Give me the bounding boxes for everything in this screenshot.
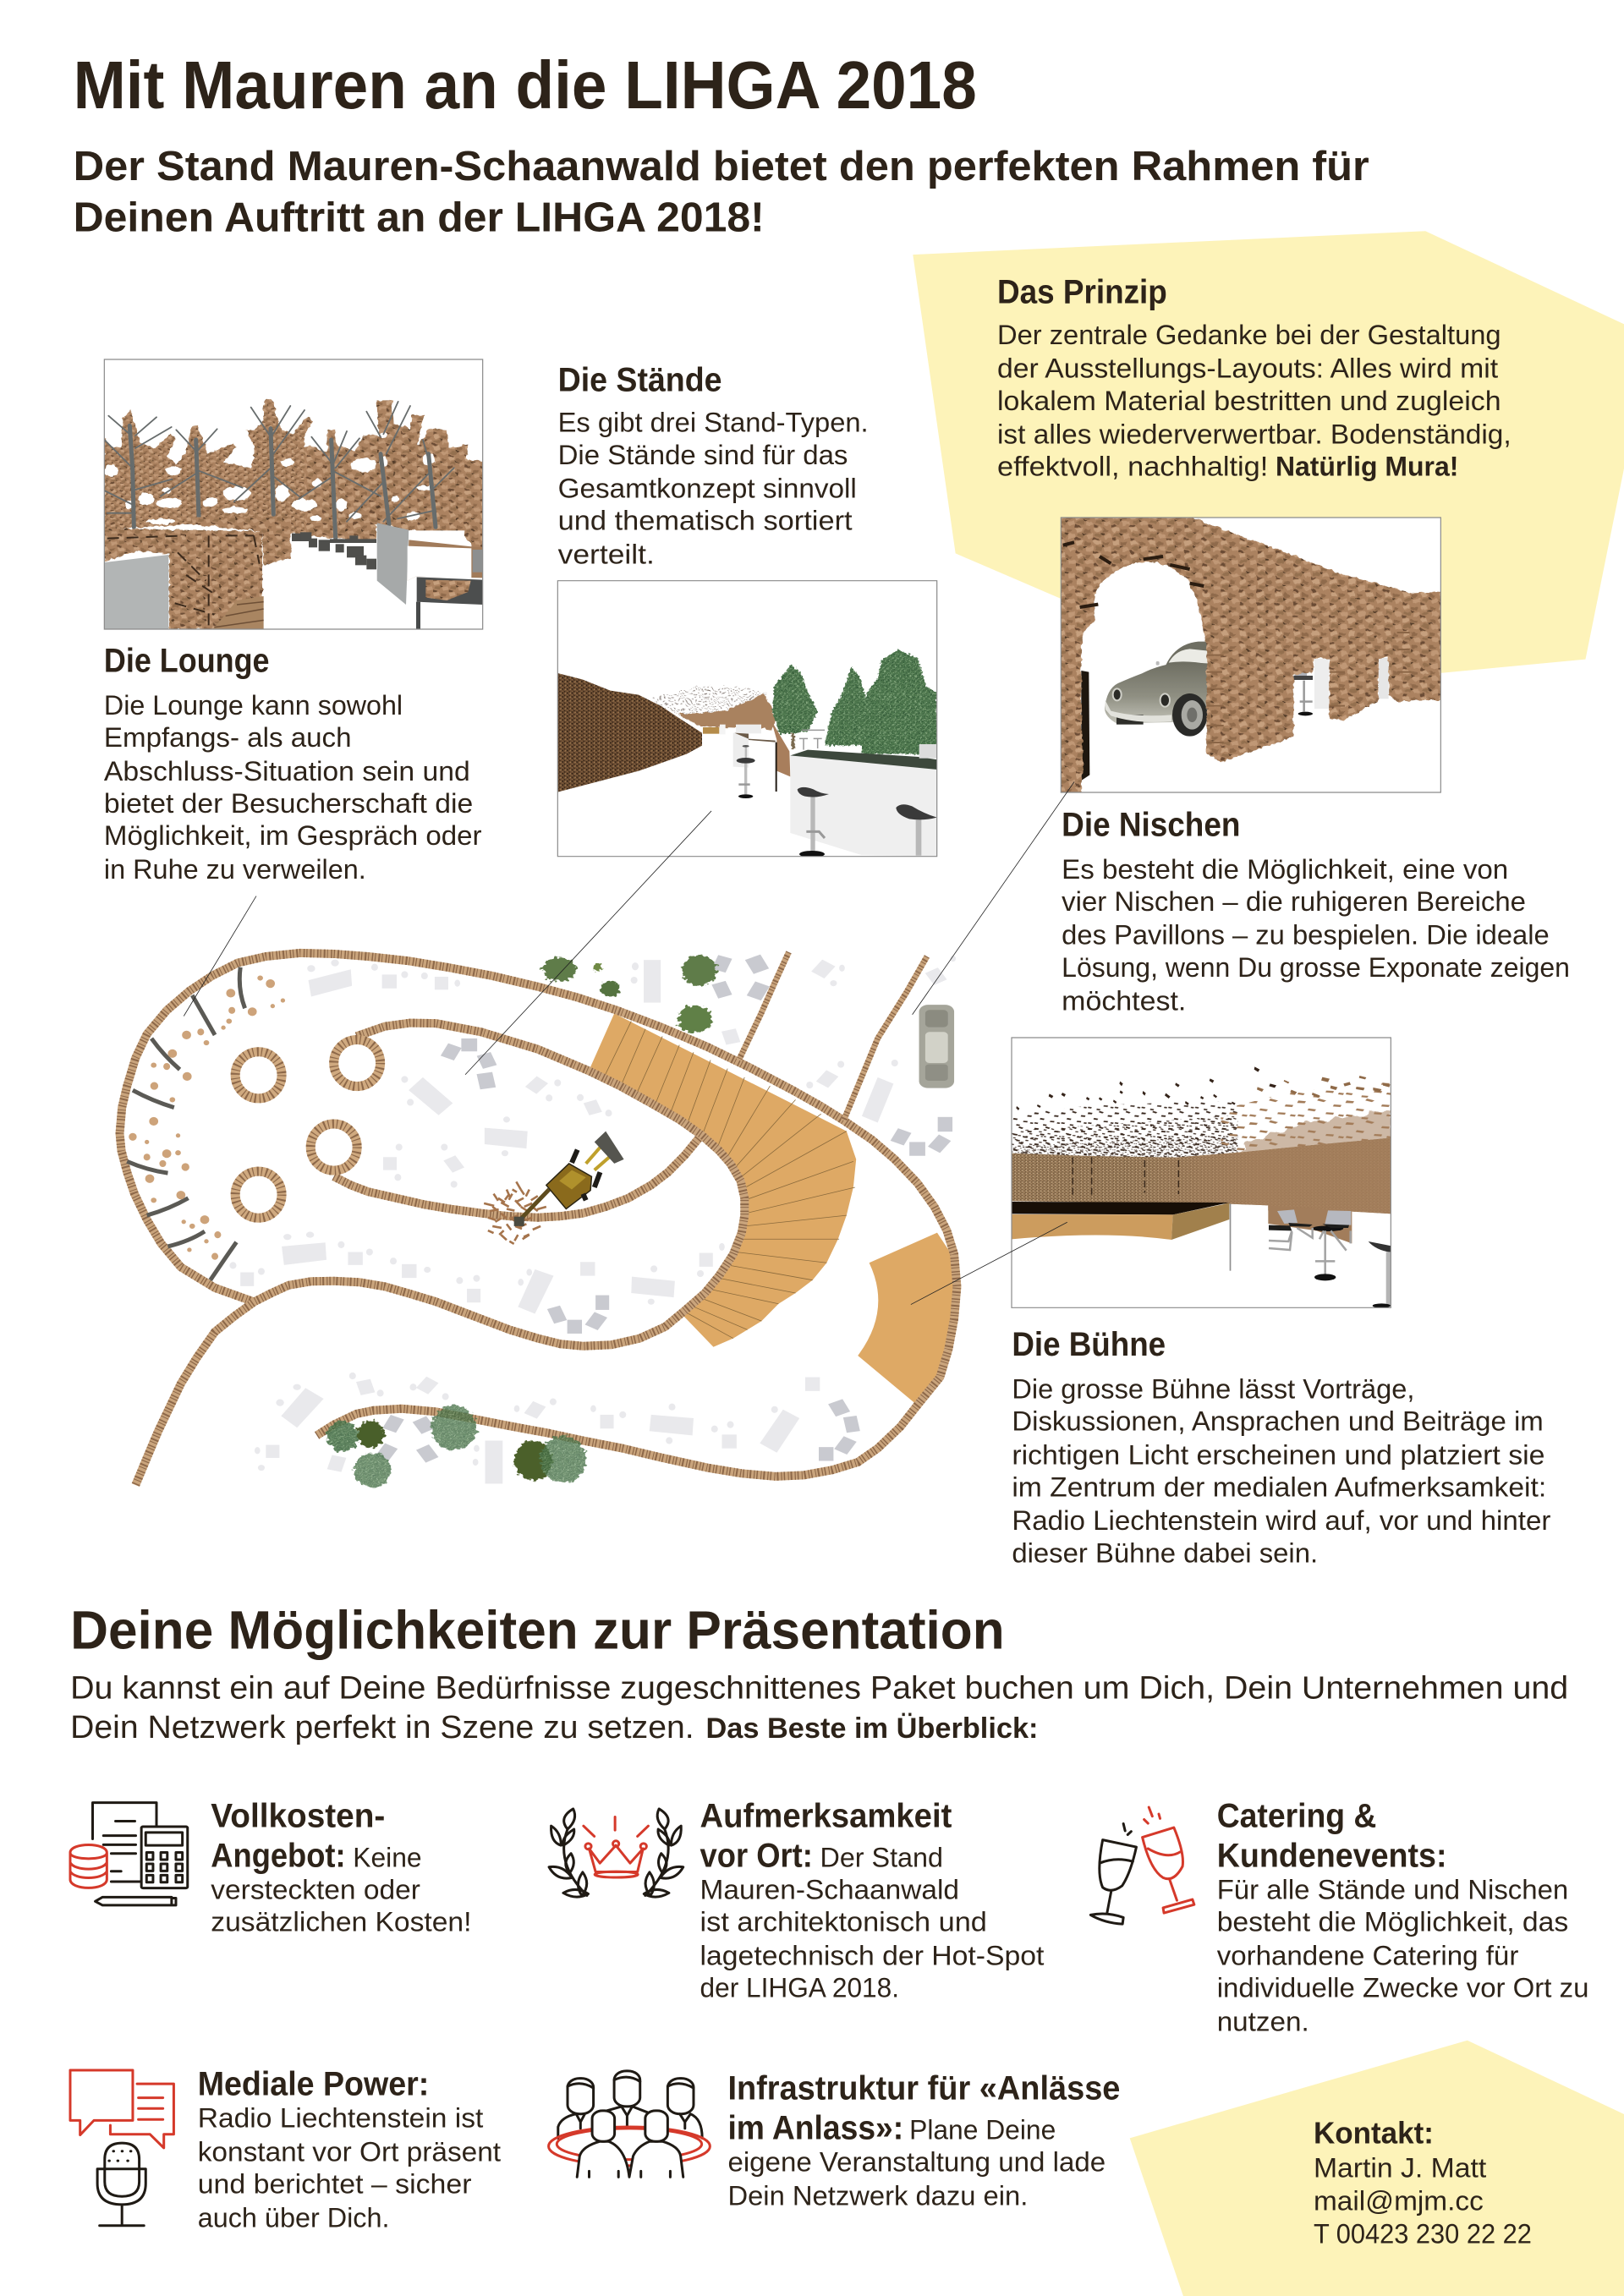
floating chips	[1012, 1066, 1391, 1158]
text block: Das Prinzip: ist alles wiederverwertbar. Bodenständig,	[997, 419, 1512, 450]
wood rings	[235, 1039, 381, 1218]
text block: Catering: besteht die Möglichkeit, das	[1217, 1907, 1568, 1937]
stool and white counters	[1293, 658, 1389, 715]
text block: Infrastruktur: Infrastruktur für «Anlässe	[727, 2070, 1120, 2107]
text block: Infrastruktur: Plane Deine	[909, 2114, 1056, 2145]
text block: Die Bühne	[1012, 1326, 1551, 1568]
text block: Die Bühne: richtigen Licht erscheinen und platziert sie	[1012, 1439, 1545, 1470]
text block: Das Prinzip: Der zentrale Gedanke bei der Gestaltung	[997, 320, 1501, 350]
text block: Die Stände: Gesamtkonzept sinnvoll	[558, 474, 857, 504]
text block: Vollkosten: versteckten oder	[211, 1874, 420, 1904]
text block: Mediale Power: Radio Liechtenstein ist	[198, 2103, 483, 2134]
yellow shape: Kontakt	[1130, 2041, 1624, 2296]
text block: Die Stände: verteilt.	[558, 540, 655, 570]
wall band	[1012, 1137, 1393, 1214]
icon: chat bubbles and microphone	[70, 2070, 173, 2226]
chairs and tables	[1269, 1209, 1393, 1308]
text block: Kontakt: T 00423 230 22 22	[1314, 2218, 1532, 2249]
trees top view	[326, 955, 716, 1488]
text block: Vollkosten: zusätzlichen Kosten!	[211, 1907, 471, 1937]
text block: Kontakt	[1314, 2116, 1532, 2249]
text block: Catering: Kundenevents:	[1217, 1837, 1447, 1874]
text block: Mediale Power: und berichtet – sicher	[198, 2168, 472, 2199]
text block: Die Nischen: Es besteht die Möglichkeit, eine von	[1062, 854, 1508, 885]
intro paragraph	[70, 1670, 1568, 1745]
text block: Infrastruktur: Dein Netzwerk dazu ein.	[727, 2180, 1028, 2211]
text block: Aufmerksamkeit: Aufmerksamkeit	[700, 1798, 952, 1835]
icon: calculator and documents	[70, 1803, 188, 1905]
text block: Das Prinzip: lokalem Material bestritten und zugleich	[997, 386, 1501, 416]
text block: Infrastruktur	[727, 2070, 1120, 2211]
text block: Catering: individuelle Zwecke vor Ort zu	[1217, 1972, 1588, 2003]
text block: Aufmerksamkeit: Mauren-Schaanwald	[700, 1874, 959, 1904]
text block: Die Lounge	[104, 643, 482, 885]
distant pavilion roof	[651, 687, 776, 734]
dark wood wall	[557, 673, 702, 792]
text block: Die Lounge: Möglichkeit, im Gespräch oder	[104, 820, 482, 851]
text block: Die Lounge: Abschluss-Situation sein und	[104, 756, 470, 786]
text block: Aufmerksamkeit: vor Ort:	[700, 1837, 813, 1874]
text block: Catering	[1217, 1798, 1588, 2036]
leader lines	[184, 782, 1074, 1305]
wall blocks	[104, 516, 291, 629]
text block: Die Lounge: Empfangs- als auch	[104, 722, 352, 753]
text block: Das Prinzip: der Ausstellungs-Layouts: Alles wird mit	[997, 353, 1498, 384]
tree canopy	[105, 399, 482, 547]
photo: Nischen	[1059, 516, 1444, 795]
title: Mit Mauren an die LIHGA 2018	[74, 47, 977, 123]
lounge seat groups	[376, 955, 952, 1463]
text block: Mediale Power	[198, 2065, 501, 2233]
text block: Die Lounge: bietet der Besucherschaft die	[104, 788, 473, 819]
furniture tables	[229, 956, 956, 1484]
text block: Aufmerksamkeit: der LIHGA 2018.	[700, 1972, 899, 2003]
white aisle	[262, 540, 416, 629]
text block: Die Bühne: Diskussionen, Ansprachen und Beiträge im	[1012, 1406, 1544, 1436]
sky gaps	[104, 433, 435, 524]
icon: people around ring	[549, 2071, 710, 2177]
text block: Die Nischen: möchtest.	[1062, 986, 1186, 1016]
intro paragraph: Das Beste im Überblick:	[705, 1712, 1038, 1745]
text block: Catering: nutzen.	[1217, 2006, 1309, 2036]
text block: Die Stände	[558, 361, 869, 570]
trees	[772, 649, 937, 754]
text block: Mediale Power: konstant vor Ort präsent	[198, 2136, 501, 2167]
text block: Infrastruktur: eigene Veranstaltung und lade	[727, 2146, 1106, 2177]
text block: Die Bühne: dieser Bühne dabei sein.	[1012, 1537, 1318, 1568]
text block: Vollkosten: Vollkosten-	[211, 1798, 385, 1835]
yellow shape: Das Prinzip	[913, 231, 1624, 673]
text block: Die Lounge: Die Lounge	[104, 643, 270, 680]
text block: Aufmerksamkeit: ist architektonisch und	[700, 1907, 987, 1937]
text block: Aufmerksamkeit: lagetechnisch der Hot-Spot	[700, 1940, 1044, 1970]
dark steps	[292, 532, 376, 569]
text block: Die Stände: Es gibt drei Stand-Typen.	[558, 408, 869, 438]
counters	[733, 721, 937, 857]
lounge seats dots	[129, 975, 285, 1260]
stage floor: stairs fan	[589, 1013, 856, 1347]
text block: Kontakt: Martin J. Matt	[1314, 2152, 1486, 2183]
car top view	[919, 1005, 954, 1088]
tree trunks	[104, 402, 454, 539]
text block: Die Lounge: in Ruhe zu verweilen.	[104, 854, 366, 885]
text block: Die Bühne: Die Bühne	[1012, 1326, 1166, 1363]
text block: Die Bühne: im Zentrum der medialen Aufmerksamkeit:	[1012, 1471, 1546, 1502]
text block: Mediale Power: auch über Dich.	[198, 2202, 390, 2233]
text block: Vollkosten	[211, 1798, 471, 1937]
text block: Mediale Power: Mediale Power:	[198, 2065, 429, 2102]
text block: Catering: Catering &	[1217, 1798, 1376, 1835]
text block: Aufmerksamkeit	[700, 1798, 1044, 2003]
photo: Lounge	[104, 359, 485, 629]
text block: Die Bühne: Die grosse Bühne lässt Vorträge,	[1012, 1373, 1414, 1404]
text block: Die Nischen: des Pavillons – zu bespielen. Die ideale	[1062, 920, 1550, 951]
text block: Infrastruktur: im Anlass»:	[727, 2109, 903, 2146]
subtitle: Deinen Auftritt an der LIHGA 2018!	[74, 195, 765, 241]
car	[1105, 642, 1211, 737]
stage slab	[1012, 1202, 1229, 1240]
intro paragraph: Dein Netzwerk perfekt in Szene zu setzen.	[70, 1710, 694, 1745]
subtitle	[74, 143, 1369, 241]
section heading: Deine Möglichkeiten zur Präsentation	[70, 1599, 1005, 1660]
wood chips pile	[484, 1181, 546, 1244]
floor plan	[120, 952, 957, 1488]
text block: Das Prinzip: Das Prinzip	[997, 273, 1167, 310]
text block: Die Nischen	[1062, 807, 1570, 1016]
shadow gaps in arch	[1063, 542, 1204, 607]
photo: Bühne	[1012, 1038, 1393, 1308]
bar stools	[737, 745, 937, 858]
icon: clinking glasses	[1090, 1807, 1194, 1924]
pavilion walls	[120, 952, 957, 1485]
text block: Das Prinzip: effektvoll, nachhaltig!	[997, 452, 1268, 482]
lounge dark dividers	[127, 967, 245, 1280]
far stools	[799, 730, 825, 750]
subtitle: Der Stand Mauren-Schaanwald bietet den perfekten Rahmen für	[74, 143, 1369, 189]
text block: Die Nischen: Die Nischen	[1062, 807, 1240, 844]
text block: Die Stände: Die Stände sind für das	[558, 440, 848, 470]
text block: Kontakt: Kontakt:	[1314, 2116, 1434, 2151]
black panel	[1081, 671, 1089, 781]
white counters	[408, 530, 483, 629]
text block: Kontakt: mail@mjm.cc	[1314, 2185, 1484, 2216]
text block: Die Stände: Die Stände	[558, 361, 722, 398]
brick arch wall	[1059, 516, 1444, 795]
text block: Vollkosten: Angebot:	[211, 1837, 346, 1874]
text block: Die Nischen: vier Nischen – die ruhigeren Bereiche	[1062, 886, 1526, 917]
text block: Das Prinzip: Natürlig Mura!	[1276, 452, 1458, 482]
text block: Catering: vorhandene Catering für	[1217, 1940, 1519, 1970]
text block: Catering: Für alle Stände und Nischen	[1217, 1874, 1568, 1904]
back wall edge	[1230, 1203, 1231, 1271]
grey partition	[377, 523, 409, 605]
text block: Die Lounge: Die Lounge kann sowohl	[104, 690, 403, 721]
icon: crown and laurels	[549, 1809, 683, 1897]
intro paragraph: Du kannst ein auf Deine Bedürfnisse zugeschnittenes Paket buchen um Dich, Dein Unternehmen und	[70, 1670, 1568, 1706]
text block: Die Bühne: Radio Liechtenstein wird auf, vor und hinter	[1012, 1505, 1551, 1536]
text block: Die Stände: und thematisch sortiert	[558, 506, 853, 536]
text block: Das Prinzip	[997, 273, 1512, 482]
text block: Die Nischen: Lösung, wenn Du grosse Exponate zeigen	[1062, 952, 1570, 983]
text block: Aufmerksamkeit: Der Stand	[820, 1842, 943, 1872]
tractor	[514, 1132, 624, 1226]
stage floor: Bühne	[858, 1233, 954, 1406]
front edge stack	[1207, 633, 1411, 743]
text block: Vollkosten: Keine	[353, 1842, 422, 1872]
photo: Stände	[557, 581, 937, 858]
